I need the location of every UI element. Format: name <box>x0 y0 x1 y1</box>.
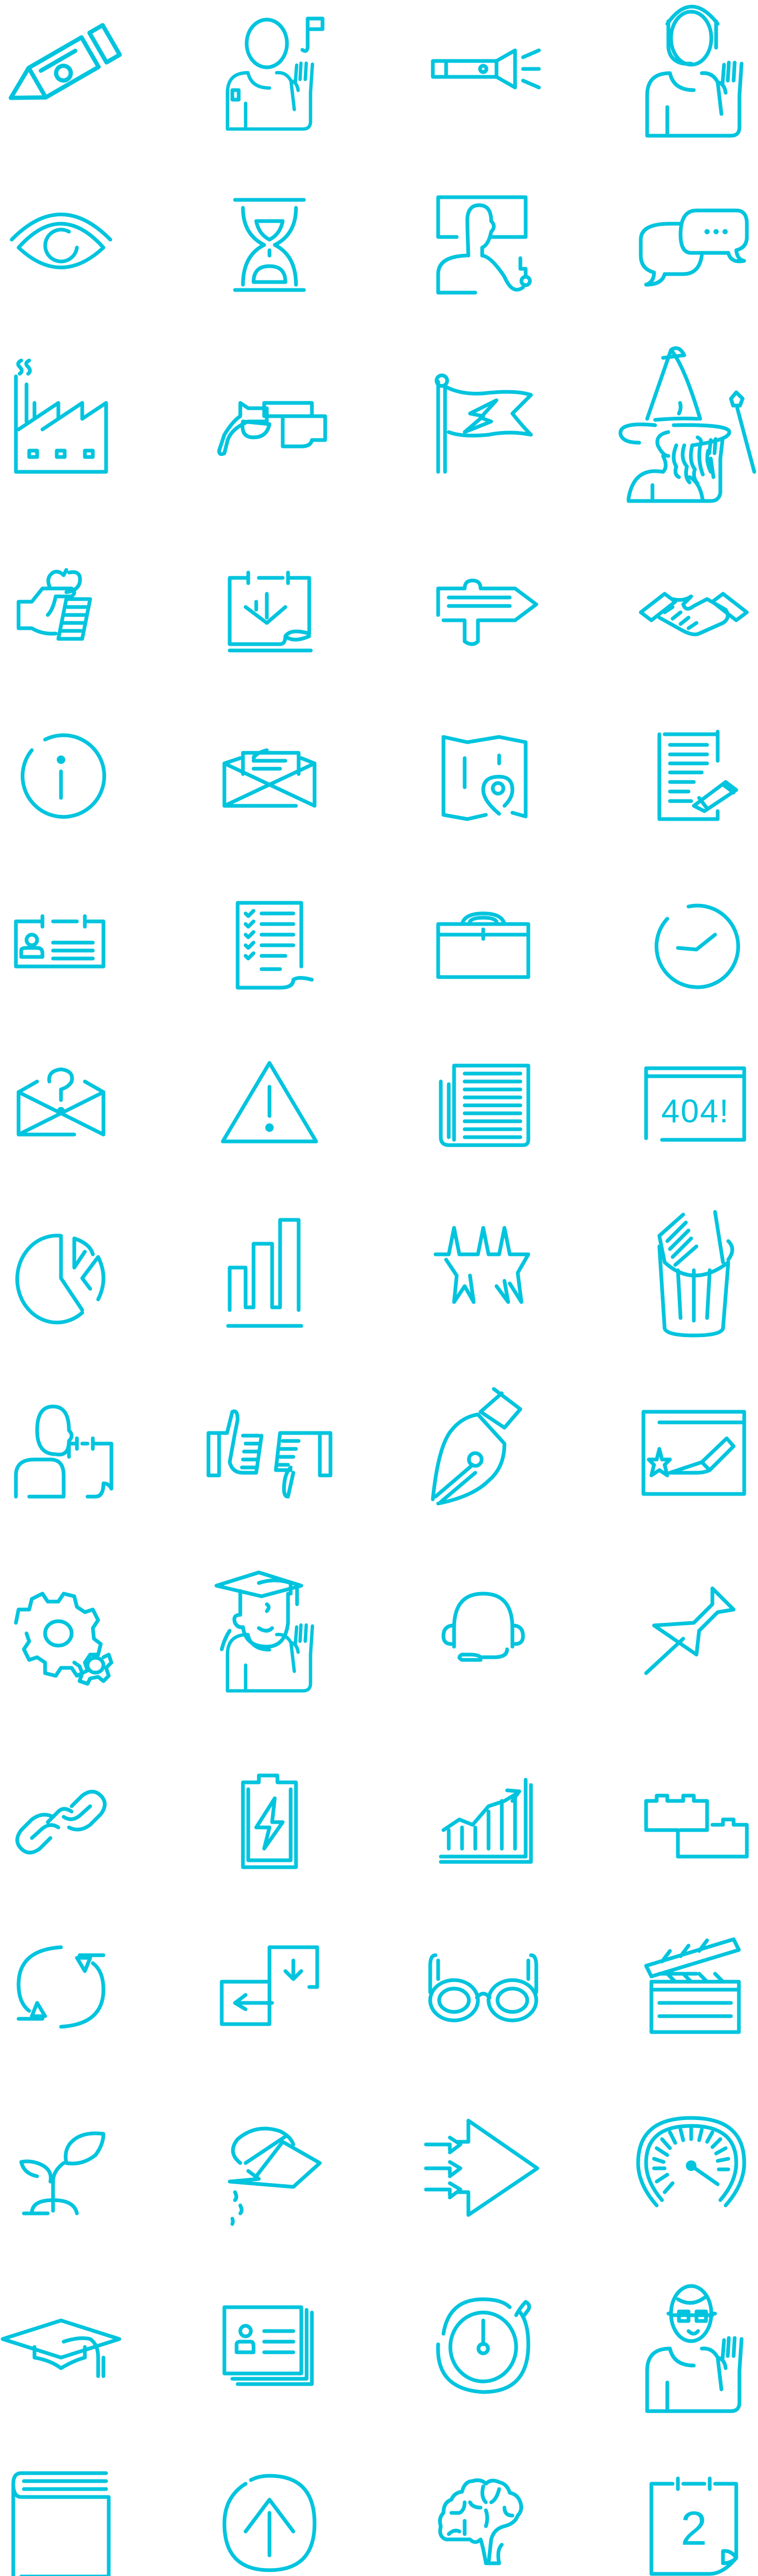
icon: toolbox <box>438 913 528 977</box>
icon: stopwatch <box>438 2299 529 2392</box>
icon: person with flag <box>228 19 323 129</box>
icon: flashlight <box>433 50 539 87</box>
icon: glasses <box>430 1955 536 2020</box>
icon: hand with wrench and phone <box>19 570 90 639</box>
icon: envelope with question <box>19 1069 103 1135</box>
icon: brain <box>440 2480 521 2563</box>
icon: 404 browser <box>646 1068 744 1140</box>
icon: newspaper <box>441 1066 528 1145</box>
icon: headset <box>443 1594 523 1660</box>
icon: chain link <box>17 1792 105 1852</box>
icon: eye <box>12 214 110 267</box>
icon: pouring bucket <box>230 2129 320 2224</box>
icon: person with glasses <box>647 2286 742 2411</box>
icon: speedometer <box>638 2118 744 2205</box>
icon: book <box>13 2473 109 2576</box>
icon: presenter at screen <box>438 197 530 293</box>
icon: blocks <box>646 1796 747 1857</box>
icon: warning triangle <box>223 1063 316 1141</box>
icon: growth chart <box>441 1780 531 1862</box>
icon: person share <box>16 1406 111 1497</box>
icon: pie chart <box>17 1236 103 1323</box>
icon: envelope with letter <box>224 750 315 806</box>
icon: cards stack <box>224 2307 312 2384</box>
icon: clapperboard <box>646 1939 739 2032</box>
icon: 404 browser: 404! <box>661 1093 729 1130</box>
icon: support person with headset <box>647 6 742 136</box>
icon: swap boxes <box>222 1947 317 2024</box>
icon: pushpin <box>646 1588 734 1673</box>
icon: graduation cap <box>3 2320 119 2376</box>
icon: wizard <box>621 348 754 501</box>
icon: battery <box>243 1775 296 1867</box>
icon: calendar 2 <box>651 2478 736 2576</box>
icon: browser with star and pencil <box>643 1412 744 1494</box>
icon: bar chart <box>228 1220 301 1326</box>
icon: chat bubbles <box>641 210 747 285</box>
icon: info circle <box>23 735 104 817</box>
icon: handshake <box>641 594 747 635</box>
icon: hand with device <box>219 403 325 454</box>
icon: circle up arrow <box>224 2476 315 2570</box>
icon: flag with lightning <box>437 375 531 472</box>
icon: calendar 2: 2 <box>681 2502 707 2555</box>
icon: fast forward arrow <box>426 2121 537 2215</box>
icon: download tray <box>230 573 311 650</box>
icon: document with pencil <box>659 732 736 819</box>
icon: graduate person <box>216 1572 312 1691</box>
icon: sprout <box>21 2133 103 2213</box>
icon: thumbs up down <box>208 1411 330 1497</box>
icon: signpost <box>438 581 536 644</box>
icon: fountain pen nib <box>433 1389 520 1504</box>
icon: refresh arrows <box>19 1947 103 2027</box>
icon: factory <box>16 361 106 472</box>
icon: trash bin <box>659 1212 732 1335</box>
icon: id card <box>16 916 103 966</box>
icon: hourglass <box>235 200 304 290</box>
icon: checklist <box>238 903 312 988</box>
icon: three stars <box>435 1228 528 1302</box>
icon: clock <box>657 905 738 987</box>
icon: map with pin <box>443 737 526 819</box>
icon: pencil <box>2 25 120 113</box>
icon: gears <box>16 1594 111 1684</box>
